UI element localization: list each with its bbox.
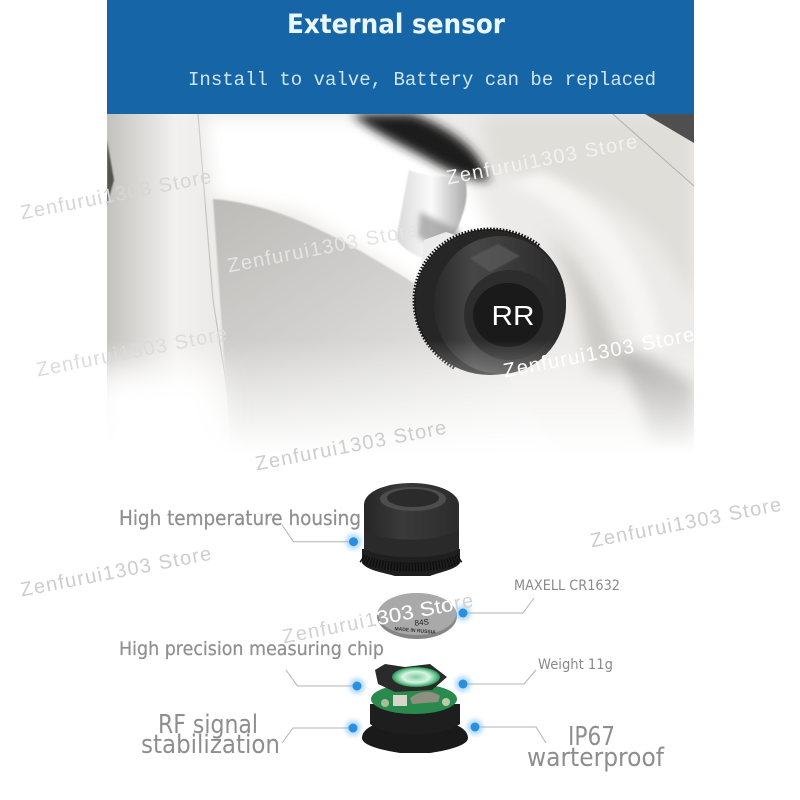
photo: wheel rim with valve sensor [107, 114, 694, 444]
header banner [107, 0, 694, 114]
store watermarks [19, 131, 783, 648]
callout: measuring chip: High precision measuring chip [119, 638, 384, 660]
battery origin text: MADE IN RUSSIA [394, 626, 436, 636]
callout: IP67 waterproof: warterproof [527, 743, 665, 773]
callout: high temperature housing: High temperature housing [119, 506, 361, 530]
valve stem [396, 170, 468, 269]
callout: RF signal stabilization: RF signal [158, 710, 258, 740]
store watermarks: Zenfurui1303 Store [589, 494, 783, 552]
exploded view: housing [362, 483, 460, 576]
store watermarks: Zenfurui1303 Store [35, 323, 229, 381]
store watermarks: Zenfurui1303 Store [445, 131, 639, 189]
watermark highlight over battery: Zenfurui1303 Store [281, 590, 475, 648]
callout: measuring chip [119, 638, 384, 694]
top right rim surface [480, 114, 694, 300]
callout: high temperature housing [119, 506, 362, 550]
callout: battery model: MAXELL CR1632 [514, 578, 620, 594]
sensor body [414, 229, 566, 375]
left rim band [107, 114, 156, 384]
photo bottom fade [107, 340, 694, 474]
callout: IP67 waterproof: IP67 [568, 722, 615, 752]
sensor label: RR [492, 300, 534, 331]
rim base surface [198, 114, 694, 416]
thin highlight line [612, 114, 694, 186]
callout: weight [455, 657, 613, 692]
exploded view: coin battery [377, 593, 457, 639]
bright highlight area [198, 116, 493, 282]
subtitle: Install to valve, Battery can be replaced [188, 69, 656, 91]
shadow beneath sensor [610, 350, 694, 450]
tyre dark shadow [352, 114, 490, 180]
rim line [198, 114, 226, 384]
store watermarks: Zenfurui1303 Store [226, 219, 420, 277]
store watermarks: Zenfurui1303 Store [19, 166, 213, 224]
store watermarks: Zenfurui1303 Store [281, 590, 475, 648]
exploded view: circuit board and base [362, 664, 468, 753]
store watermarks: Zenfurui1303 Store [19, 543, 213, 601]
callout: weight: Weight 11g [538, 657, 613, 673]
battery imprint: 84S [414, 617, 429, 628]
callout: RF signal stabilization [141, 710, 361, 760]
store watermarks: Zenfurui1303 Store [502, 324, 696, 382]
left dark edge [107, 140, 114, 205]
curved bright band [523, 172, 658, 346]
callout: IP67 waterproof [467, 719, 665, 773]
store watermarks: Zenfurui1303 Store [254, 417, 448, 475]
grey inner wheel surface [212, 198, 448, 414]
photo left fade [107, 355, 226, 440]
outer rim shadow band [552, 242, 621, 380]
callout: RF signal stabilization: stabilization [141, 730, 280, 760]
title: External sensor [287, 9, 506, 40]
callout: battery model [455, 578, 620, 621]
top right dark corner [645, 114, 694, 143]
